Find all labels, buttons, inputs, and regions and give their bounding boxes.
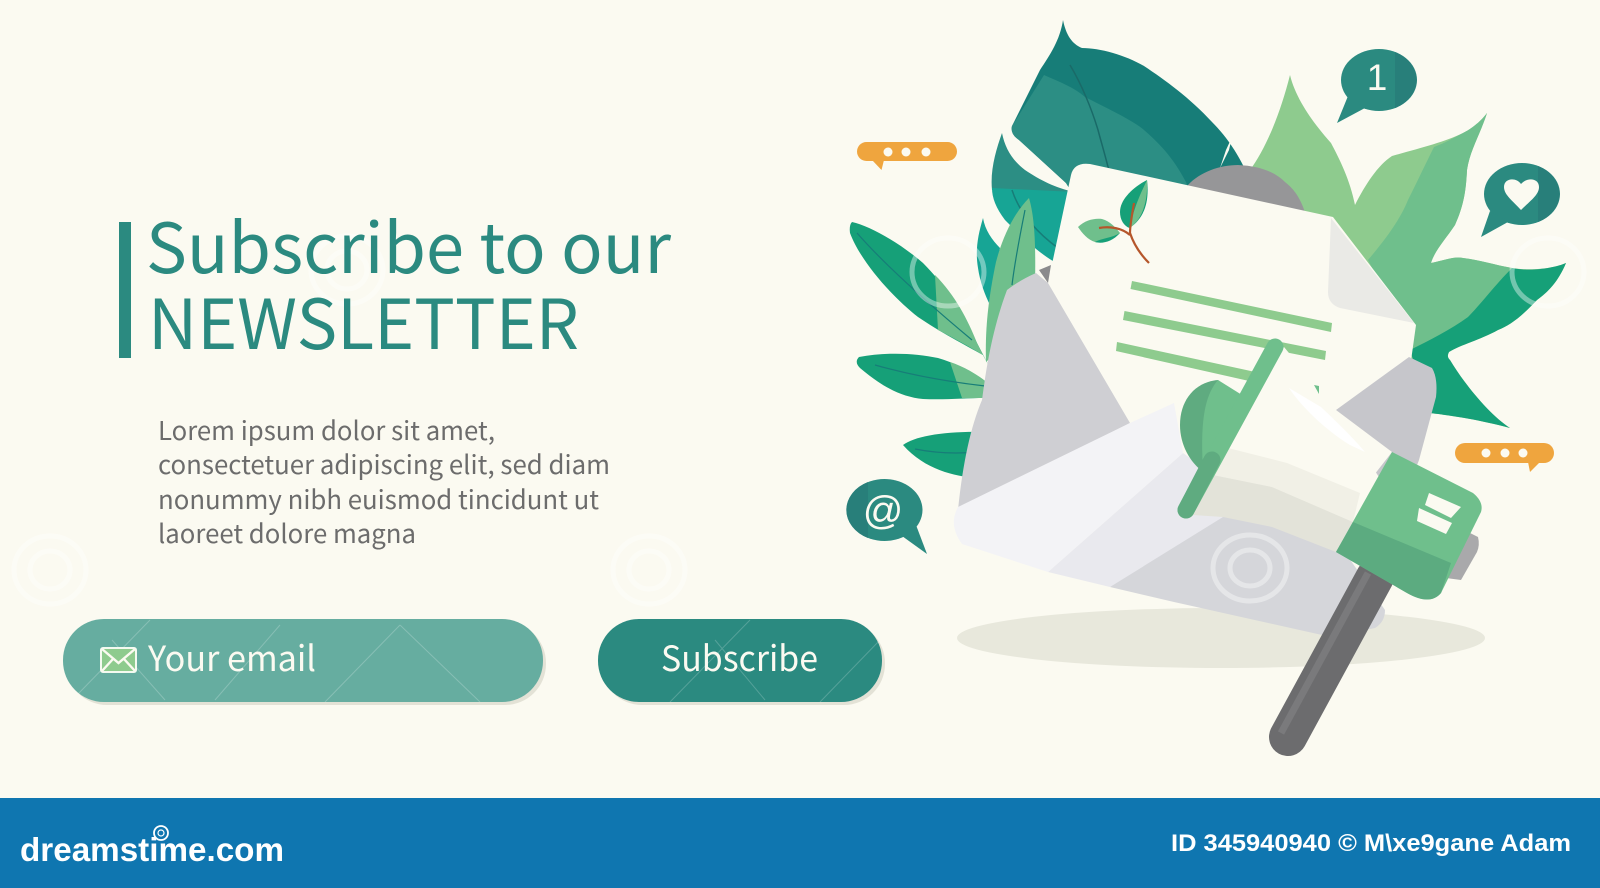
- large teal leaf: [1012, 20, 1258, 240]
- megaphone: [1180, 347, 1482, 737]
- body text: consectetuer adipiscing elit, sed diam: [158, 445, 610, 482]
- footer credit: ID 345940940 © M\xe9gane Adam: [1171, 830, 1571, 857]
- left leaves: [850, 222, 990, 478]
- lower teal leaf: [992, 133, 1075, 265]
- envelope: [954, 265, 1436, 637]
- ground shadow: [957, 608, 1485, 668]
- bubble: heart: [1481, 163, 1560, 237]
- title: NEWSLETTER: [148, 269, 579, 369]
- bell back: [1180, 380, 1250, 472]
- end cap: [1446, 532, 1479, 580]
- footer bar: [0, 798, 1600, 888]
- gray flap back: [1188, 165, 1305, 212]
- paper lines: [1116, 281, 1332, 383]
- letter: [1048, 164, 1416, 500]
- small teal leaf: [977, 218, 1000, 305]
- collar: [1336, 452, 1482, 600]
- bubble: orange dots right: [1455, 443, 1554, 472]
- handle: [1281, 573, 1375, 737]
- input placeholder: Your email: [147, 631, 316, 682]
- subscribe button: [598, 619, 885, 705]
- letter back flap: [1328, 218, 1414, 323]
- bell rim: [1186, 347, 1275, 510]
- bubble: notification: [1337, 49, 1417, 123]
- bubble: notification: 1: [1367, 57, 1387, 98]
- email input: [63, 619, 546, 705]
- subscribe button: Subscribe: [661, 631, 818, 682]
- bubble: at sign: @: [863, 489, 903, 533]
- cone: [1193, 347, 1392, 552]
- title: Subscribe to our: [146, 193, 671, 293]
- maple leaf: [1250, 75, 1566, 428]
- bubble: orange dots top: [857, 142, 957, 170]
- body text: nonummy nibh euismod tincidunt ut: [158, 480, 599, 517]
- accent bar: [119, 222, 131, 358]
- icon: mail: [101, 648, 136, 672]
- icon: sprig: [1078, 180, 1149, 263]
- body text: [158, 411, 610, 551]
- footer logo: dreamstime.com: [20, 831, 284, 868]
- tall light leaf: [986, 198, 1035, 362]
- body text: Lorem ipsum dolor sit amet,: [158, 411, 495, 448]
- illustration: envelope and megaphone: [850, 20, 1566, 737]
- title: [146, 193, 671, 369]
- bubble: at sign: [846, 479, 927, 554]
- body text: laoreet dolore magna: [158, 514, 416, 551]
